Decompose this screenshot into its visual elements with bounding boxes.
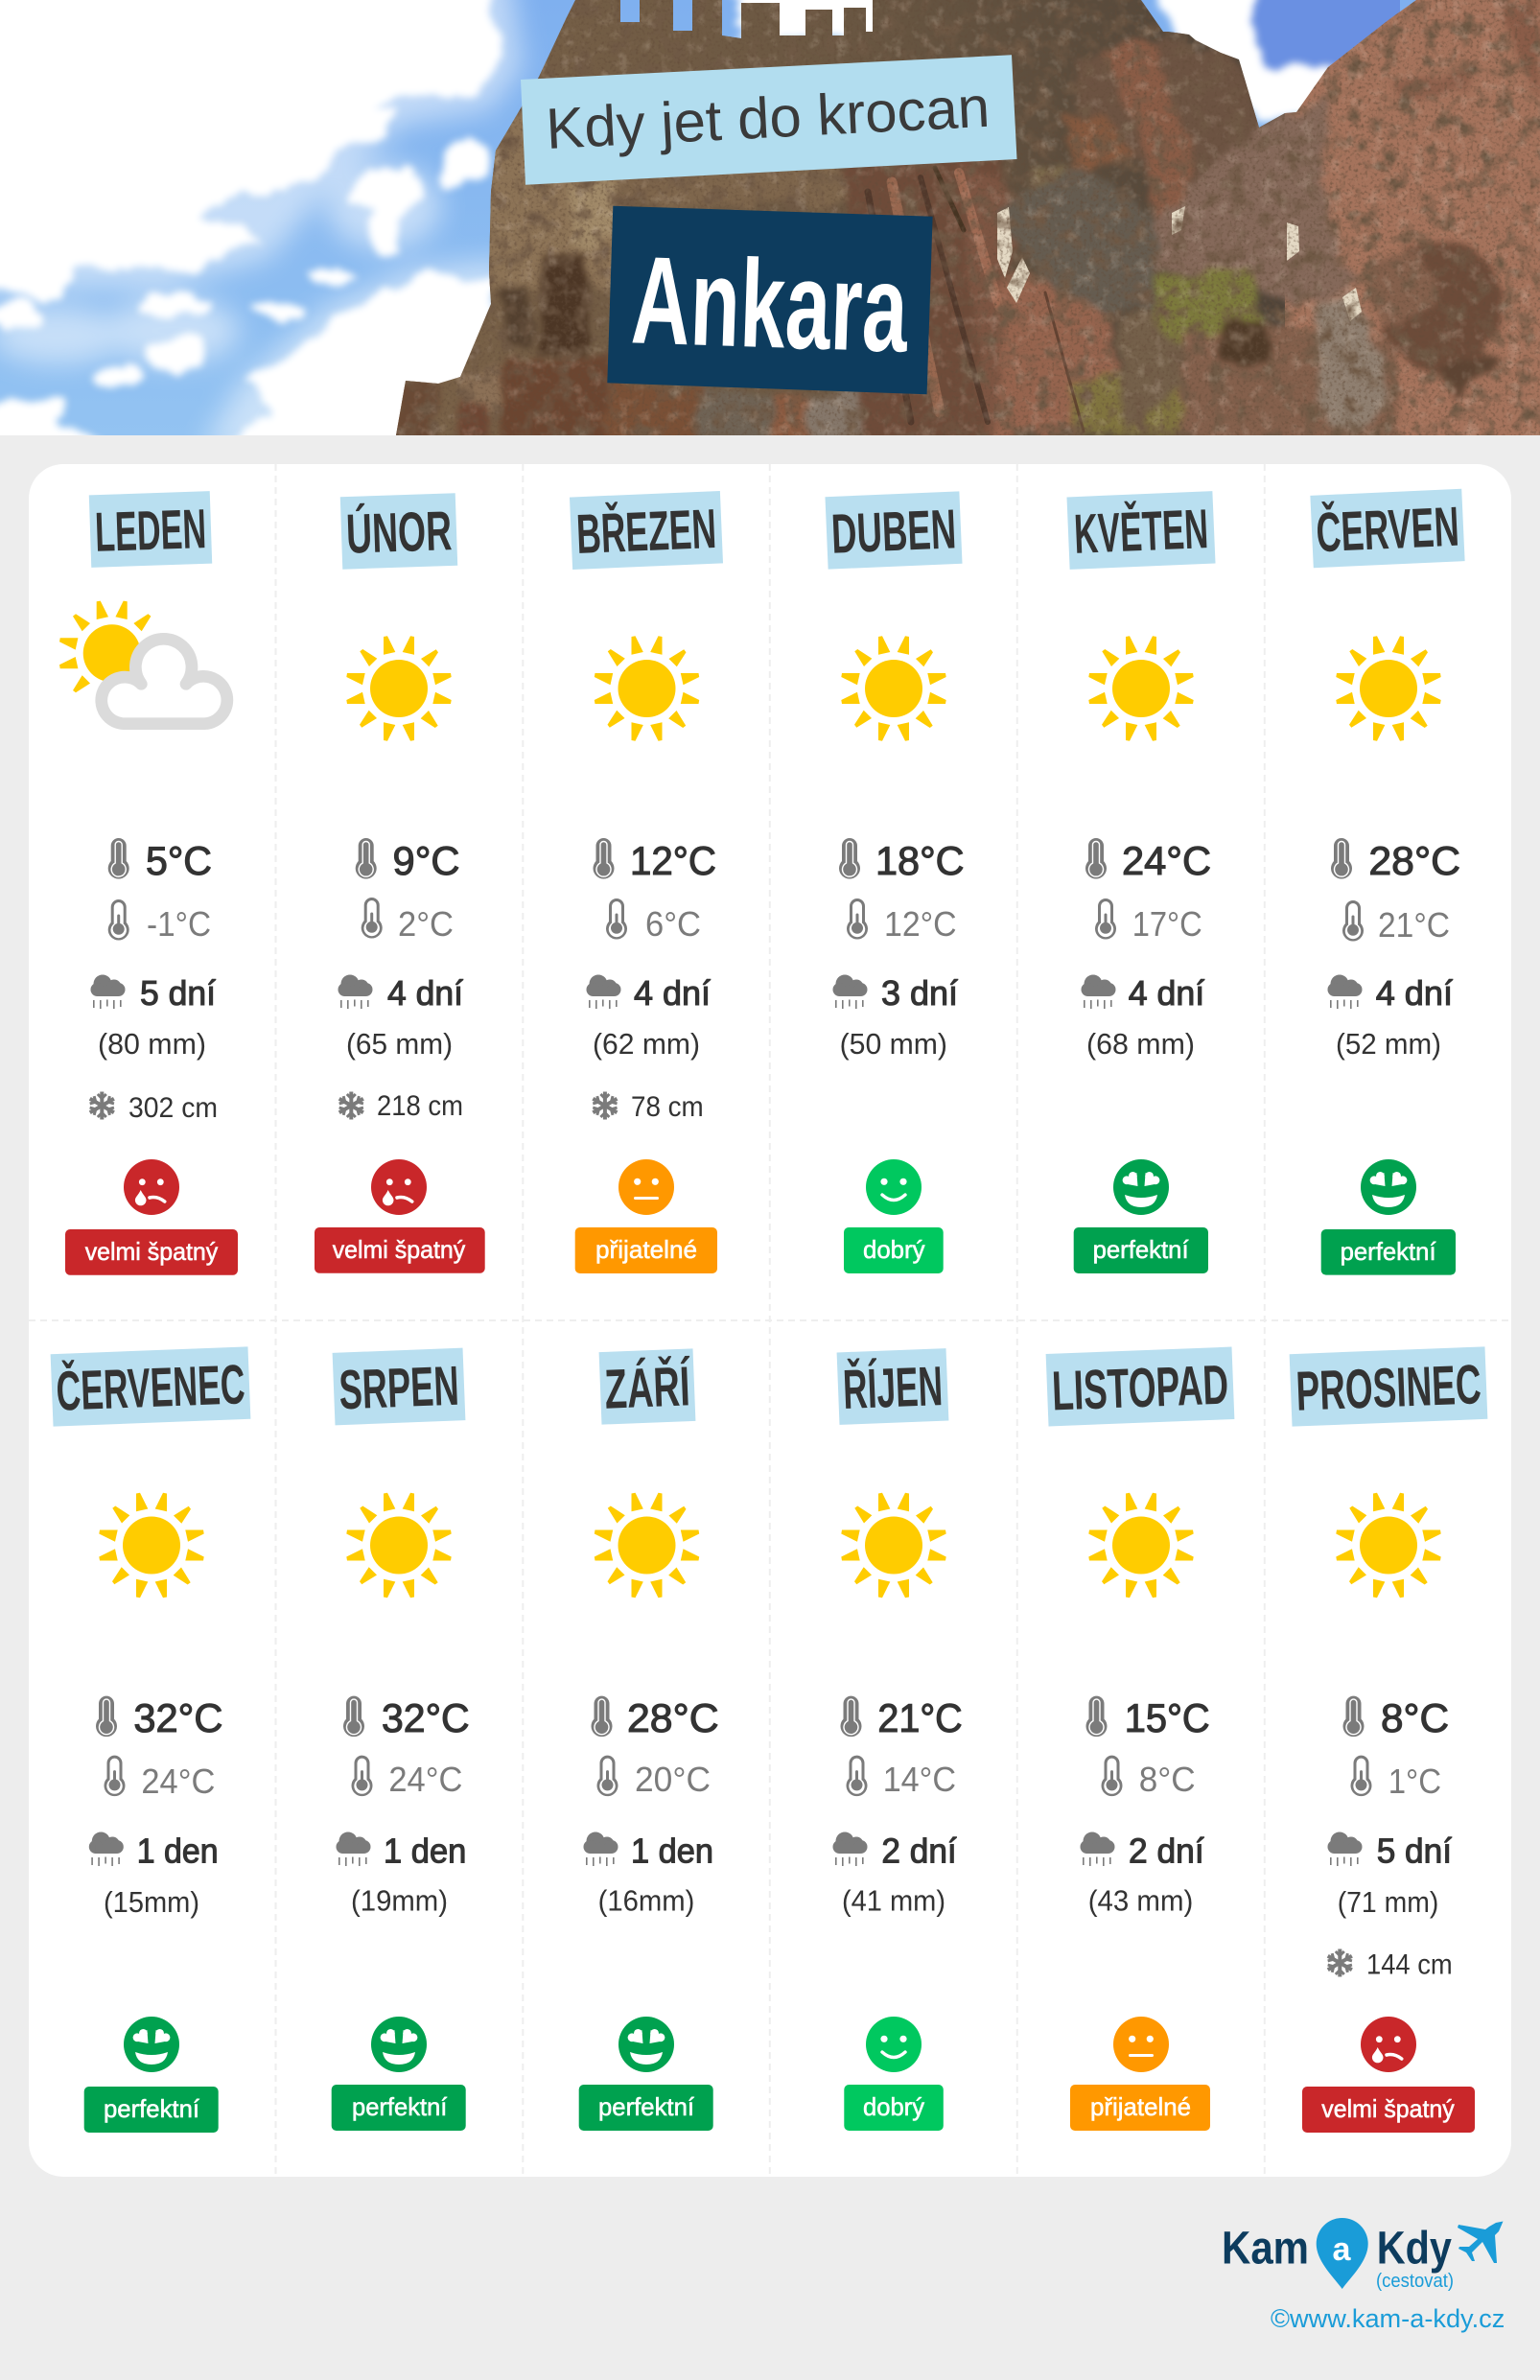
month label: červen [1310,489,1465,568]
rating badge: dobrý [863,2092,924,2121]
icon: rating face [618,2017,674,2072]
month label: květen: KVĚTEN [1073,498,1209,566]
precipitation: (68 mm) [1086,1027,1195,1061]
high temperature: 18°C [875,838,965,883]
header photo: castle on rocks under a cloudy sky [0,0,1540,451]
icon: sun [1088,1493,1194,1598]
icon: sun [346,1493,452,1598]
low temperature: 1°C [1388,1762,1441,1801]
high temperature: 15°C [1125,1695,1210,1740]
title label: Ankara [607,206,933,394]
rating badge: velmi špatný [1321,2094,1455,2123]
icon: sun [1088,636,1194,741]
icon: rain [583,1832,618,1866]
icon: map pin [1317,2218,1368,2289]
precipitation: (50 mm) [840,1027,947,1061]
icon: rating face [1113,1159,1169,1215]
low temperature: 20°C [635,1760,711,1799]
icon: rating face [866,2017,922,2072]
rating badge [1321,1229,1456,1275]
rating badge [844,2085,944,2131]
month label: listopad [1046,1347,1234,1426]
icon: low temperature [108,899,129,941]
icon: high temperature [840,1696,861,1737]
month label: listopad: LISTOPAD [1051,1353,1229,1423]
icon: high temperature [839,838,860,879]
icon: rain [1327,1832,1362,1866]
high temperature: 9°C [393,838,460,883]
icon: rain [1080,1832,1114,1866]
icon: snow [1325,1948,1354,1977]
icon: high temperature [591,1696,612,1737]
precipitation: (43 mm) [1088,1884,1193,1918]
high temperature: 5°C [146,838,212,883]
low temperature: 8°C [1139,1760,1196,1799]
rainy days: 4 dní [1129,973,1204,1013]
icon: snow [591,1091,619,1120]
rating badge: přijatelné [595,1235,697,1264]
low temperature: 12°C [884,904,957,944]
month label: květen [1066,491,1216,570]
snowfall: 144 cm [1366,1948,1453,1981]
panel: duben [825,491,965,1273]
rating badge [844,1227,944,1273]
rating badge: velmi špatný [333,1235,465,1264]
rainy days: 2 dní [1129,1832,1204,1871]
icon: rain [336,1832,370,1866]
icon: rain [1082,974,1116,1009]
precipitation: (19mm) [351,1884,448,1918]
icon: sun [1336,1493,1441,1598]
month label: únor: ÚNOR [345,500,453,566]
rainy days: 1 den [384,1832,466,1871]
icon: rain [338,974,372,1009]
icon: rating face [1113,2017,1169,2072]
rainy days: 3 dní [881,973,958,1013]
month label: duben [825,491,963,570]
rating badge: velmi špatný [85,1237,218,1266]
month label: srpen: SRPEN [338,1355,460,1421]
icon: rain [832,974,867,1009]
panel: prosinec [1290,1346,1487,2133]
month label: březen: BŘEZEN [575,498,717,566]
precipitation: (16mm) [598,1884,694,1918]
rating badge: přijatelné [1090,2092,1191,2121]
rating badge: dobrý [863,1235,924,1264]
icon: low temperature [1350,1756,1371,1796]
precipitation: (80 mm) [98,1027,206,1061]
precipitation: (41 mm) [842,1884,945,1918]
high temperature: 32°C [382,1695,470,1740]
icon: high temperature [1085,838,1107,879]
icon: low temperature [362,898,383,939]
rainy days: 1 den [137,1832,219,1871]
rating badge [65,1229,238,1275]
month label: duben: DUBEN [830,498,957,566]
month label: září: ZÁŘÍ [603,1355,692,1421]
rating badge [575,1227,717,1273]
icon: rain [587,974,621,1009]
precipitation: (62 mm) [593,1027,700,1061]
white calendar card [29,464,1511,2177]
rating badge: perfektní [104,2094,200,2123]
rainy days: 4 dní [634,973,711,1013]
icon: high temperature [1331,838,1352,879]
icon: sun behind cloud [59,601,227,724]
rainy days: 4 dní [387,973,463,1013]
icon: rating face [124,2017,179,2072]
high temperature: 28°C [627,1695,719,1740]
snowfall: 302 cm [128,1092,218,1124]
icon: low temperature [1342,900,1364,942]
precipitation: (52 mm) [1336,1027,1441,1061]
panel: listopad [1046,1347,1234,2131]
precipitation: (71 mm) [1338,1885,1438,1919]
icon: high temperature [356,838,377,879]
icon: high temperature [108,838,129,879]
icon: high temperature [343,1696,364,1737]
month label: březen [570,491,723,570]
month label: říjen [837,1348,948,1425]
rating badge [332,2085,466,2131]
rating badge [1070,2085,1210,2131]
icon: low temperature [351,1756,372,1796]
icon: sun [841,636,946,741]
month label: srpen [333,1348,465,1425]
precipitation: (15mm) [104,1885,199,1919]
month label: červenec: ČERVENEC [55,1353,246,1423]
icon: sun [595,1493,699,1598]
high temperature: 21°C [877,1695,963,1740]
month label: únor [340,493,457,570]
snowfall: 78 cm [631,1091,704,1123]
icon: rating face [124,1159,179,1215]
panel: srpen [332,1348,470,2131]
website url: ©www.kam-a-kdy.cz [1271,2304,1505,2333]
panel: květen [1066,491,1216,1273]
rating badge [579,2085,713,2131]
icon: rain [90,974,125,1009]
rating badge: perfektní [352,2092,448,2121]
high temperature: 32°C [133,1695,222,1740]
month label: leden [89,491,212,568]
icon: rain [1327,974,1362,1009]
icon: rating face [1361,2017,1416,2072]
icon: snow [87,1091,116,1120]
low temperature: 21°C [1378,905,1450,945]
low temperature: 24°C [141,1762,215,1801]
snowfall: 218 cm [377,1090,463,1122]
panel: březen [570,491,723,1273]
rainy days: 1 den [631,1832,713,1871]
icon: rain [89,1832,124,1866]
month label: červenec [51,1346,250,1427]
icon: high temperature [96,1696,117,1737]
panel: říjen [832,1348,963,2131]
rainy days: 4 dní [1376,973,1453,1013]
month label: září [599,1348,695,1425]
logo: Kam a Kdy (cestovat): (cestovat) [1376,2271,1454,2292]
title label: Kdy jet do krocan [521,55,1016,185]
icon: sun [595,636,699,741]
icon: rain [832,1832,867,1866]
high temperature: 28°C [1368,838,1460,883]
panel: leden [59,491,238,1275]
icon: high temperature [1085,1696,1107,1737]
month label: říjen: ŘÍJEN [842,1355,944,1421]
icon: low temperature [847,898,868,940]
title label: Kdy jet do krocan: Kdy jet do krocan [545,75,992,161]
low temperature: 2°C [398,904,454,944]
icon: sun [346,636,452,741]
precipitation: (65 mm) [346,1027,453,1061]
icon: sun [1336,636,1441,741]
icon: rating face [1361,1159,1416,1215]
low temperature: 17°C [1132,904,1202,944]
low temperature: 14°C [883,1760,956,1799]
rating badge: perfektní [598,2092,695,2121]
panel: únor [315,493,485,1273]
icon: low temperature [1095,898,1116,940]
rainy days: 2 dní [881,1832,957,1871]
logo: Kam a Kdy (cestovat): Kdy [1377,2224,1452,2275]
icon: low temperature [1101,1756,1122,1796]
logo: Kam a Kdy (cestovat): Kam [1222,2224,1309,2275]
rainy days: 5 dní [1377,1832,1452,1871]
icon: low temperature [596,1756,618,1796]
high temperature: 8°C [1381,1695,1449,1740]
rating badge [1074,1227,1208,1273]
icon: rating face [371,2017,427,2072]
month label: leden: LEDEN [94,498,207,564]
high temperature: 24°C [1122,838,1211,883]
icon: rating face [618,1159,674,1215]
rating badge [1302,2087,1475,2133]
icon: high temperature [1342,1696,1364,1737]
panel: červen [1310,489,1465,1275]
icon: snow [337,1091,365,1120]
rating badge: perfektní [1093,1235,1189,1264]
rating badge [84,2087,219,2133]
rating badge [315,1227,485,1273]
logo: Kam a Kdy (cestovat): a [1333,2231,1352,2268]
low temperature: 6°C [645,904,701,944]
rainy days: 5 dní [140,973,216,1013]
icon: low temperature [104,1756,125,1796]
icon: rating face [371,1159,427,1215]
title label: Ankara: Ankara [629,229,911,379]
icon: low temperature [846,1756,867,1796]
rating badge: perfektní [1341,1237,1436,1266]
icon: sun [841,1493,946,1598]
panel: červenec [51,1346,250,2133]
high temperature: 12°C [630,838,716,883]
icon: airplane [1458,2221,1504,2263]
logo: Kam a Kdy (cestovat) [1222,2218,1504,2292]
icon: high temperature [593,838,614,879]
icon: sun [99,1493,204,1598]
low temperature: 24°C [388,1760,462,1799]
icon: low temperature [606,898,627,940]
panel: září [579,1348,719,2131]
low temperature: -1°C [147,904,211,944]
icon: rating face [866,1159,922,1215]
